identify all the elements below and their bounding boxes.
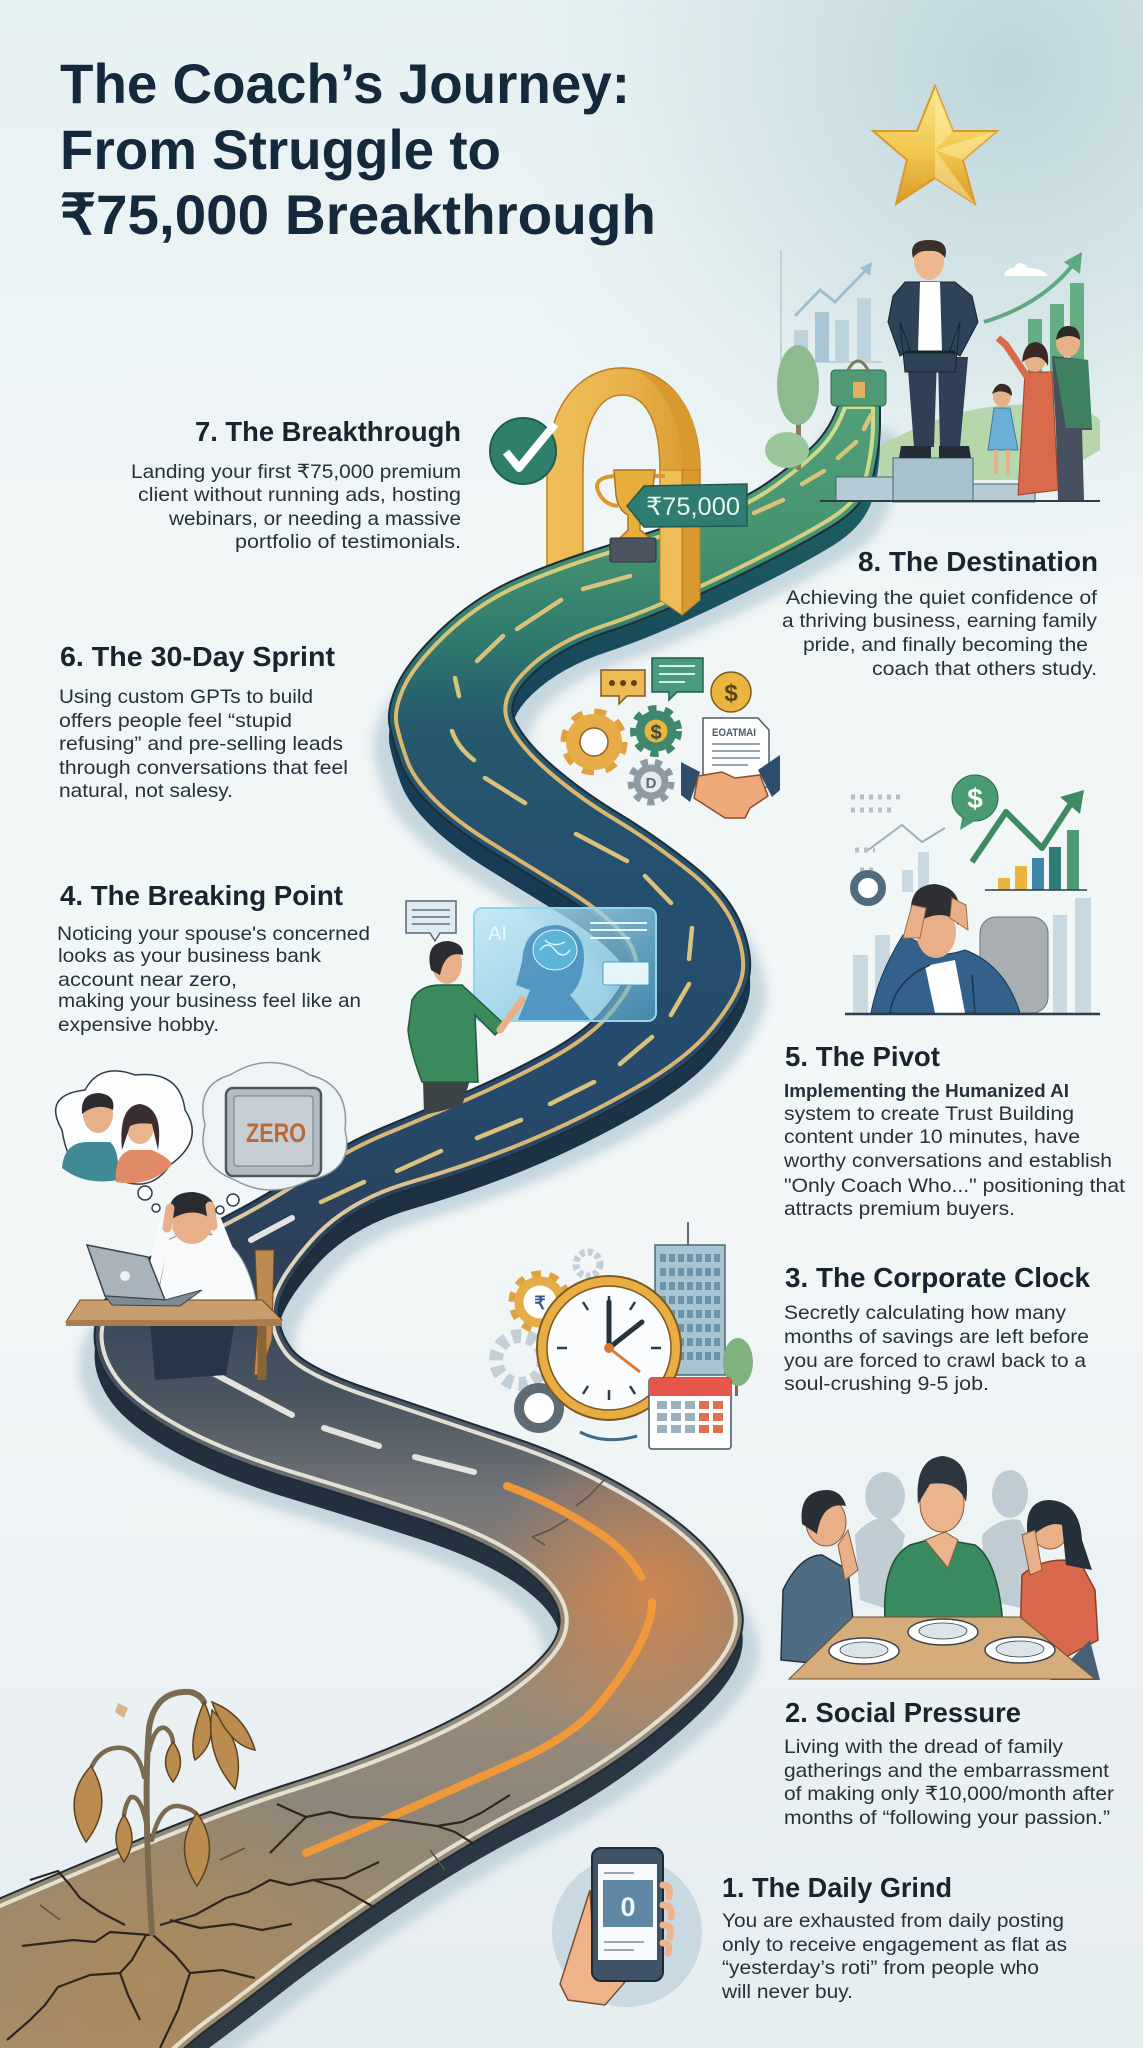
gold gear: ₹ bbox=[534, 1293, 546, 1313]
thought bubble: zero safe bbox=[203, 1062, 347, 1190]
step 4: The Breaking Point: 4. The Breaking Point bbox=[60, 880, 343, 911]
step 3: The Corporate Clock: you are forced to crawl back to a bbox=[784, 1350, 1086, 1372]
illustration: withered plant bbox=[74, 1692, 255, 1933]
data dots bbox=[851, 797, 901, 870]
stressed man at desk bbox=[66, 1192, 282, 1380]
step 5: The Pivot: Implementing the Humanized AI bbox=[784, 1081, 1069, 1101]
head bbox=[172, 1204, 212, 1244]
gold gear bbox=[566, 714, 622, 770]
phone bbox=[592, 1848, 663, 1981]
road bbox=[0, 400, 880, 2048]
step 4: The Breaking Point: Noticing your spouse's concerned bbox=[57, 923, 370, 945]
chair bbox=[254, 1250, 274, 1375]
brain head bbox=[516, 925, 590, 1020]
step 5: The Pivot bbox=[783, 1041, 1126, 1220]
step 6: The 30-Day Sprint: through conversations that feel bbox=[59, 757, 348, 779]
icon: speech bubble bbox=[406, 901, 456, 941]
step 1: The Daily Grind: 1. The Daily Grind bbox=[722, 1872, 952, 1903]
wilted leaves bbox=[74, 1702, 255, 1886]
title: The Coach’s Journey: bbox=[60, 52, 630, 115]
dollar coin bbox=[711, 672, 751, 712]
man on podium bbox=[888, 240, 978, 458]
step 5: The Pivot: attracts premium buyers. bbox=[784, 1198, 1015, 1220]
circle backdrop bbox=[552, 1857, 702, 2007]
step 7: The Breakthrough: 7. The Breakthrough bbox=[195, 416, 461, 447]
illustration: pivot stress with chart bbox=[845, 775, 1100, 1014]
step 2: Social Pressure: gatherings and the embarrassment bbox=[784, 1760, 1110, 1782]
green gear bbox=[634, 709, 678, 753]
tree bbox=[765, 345, 819, 470]
step 5: The Pivot: system to create Trust Building bbox=[784, 1103, 1074, 1125]
circular arrow bbox=[580, 1432, 637, 1440]
calendar bbox=[649, 1378, 731, 1449]
gold gear bbox=[513, 1275, 567, 1329]
step 6: The 30-Day Sprint bbox=[59, 641, 348, 802]
chat bubble gold bbox=[601, 670, 645, 704]
fingers bbox=[663, 1885, 671, 1953]
thought dots bbox=[138, 1186, 239, 1214]
step 7: The Breakthrough: Landing your first ₹75,000 premium bbox=[131, 461, 461, 483]
centre man bbox=[885, 1456, 1003, 1625]
building bbox=[655, 1222, 725, 1375]
illustration: strategy and deal icons bbox=[566, 658, 780, 818]
grey gear: D bbox=[646, 775, 657, 792]
chat bubble green bbox=[652, 658, 703, 700]
briefcase bbox=[831, 361, 886, 406]
right person bbox=[1020, 1500, 1100, 1680]
left person bbox=[781, 1490, 858, 1665]
AI label: AI bbox=[488, 923, 507, 945]
cloud bbox=[1004, 263, 1048, 276]
step 8: The Destination: 8. The Destination bbox=[858, 546, 1098, 577]
step 4: The Breaking Point: looks as your business bank bbox=[58, 945, 321, 967]
contract document bbox=[703, 718, 769, 787]
icon: green check badge bbox=[490, 418, 556, 484]
person pointing at panel bbox=[408, 941, 522, 1115]
step 6: The 30-Day Sprint: 6. The 30-Day Sprint bbox=[60, 641, 335, 672]
icon: price tag: ₹75,000 bbox=[646, 493, 740, 521]
icon: golden arch front pillar bbox=[660, 470, 700, 615]
step 7: The Breakthrough: webinars, or needing a massive bbox=[168, 508, 461, 530]
step 2: Social Pressure: of making only ₹10,000/month after bbox=[784, 1783, 1115, 1805]
step 2: Social Pressure bbox=[784, 1697, 1115, 1829]
step 3: The Corporate Clock: Secretly calculating how many bbox=[784, 1302, 1066, 1324]
step 1: The Daily Grind: will never buy. bbox=[721, 1981, 853, 2003]
podium bbox=[820, 458, 1100, 502]
pale gear bbox=[496, 1336, 544, 1384]
rising bars bbox=[985, 830, 1087, 890]
laptop bbox=[87, 1245, 202, 1306]
step 3: The Corporate Clock: 3. The Corporate Clock bbox=[785, 1262, 1090, 1293]
contract document: EOATMAI bbox=[712, 727, 756, 739]
step 6: The 30-Day Sprint: natural, not salesy. bbox=[59, 780, 233, 802]
panel bbox=[474, 908, 656, 1021]
small gears bbox=[576, 1252, 600, 1276]
tree bbox=[723, 1338, 753, 1396]
step 2: Social Pressure: Living with the dread of family bbox=[784, 1736, 1063, 1758]
dark gear bbox=[519, 1388, 559, 1428]
step 1: The Daily Grind: “yesterday’s roti” from people who bbox=[722, 1957, 1039, 1979]
road centre dashes: green and blue section bbox=[321, 415, 871, 1202]
shirt bbox=[157, 1232, 259, 1322]
hill bbox=[880, 405, 1100, 480]
handshake bbox=[681, 755, 780, 818]
safe bbox=[226, 1088, 321, 1176]
step 8: The Destination: pride, and finally becoming the bbox=[803, 634, 1088, 656]
illustration: phone in hand bbox=[552, 1848, 702, 2007]
grey gear bbox=[631, 762, 671, 802]
pale bars bbox=[853, 852, 1091, 1013]
step 2: Social Pressure: 2. Social Pressure bbox=[785, 1697, 1021, 1728]
thought bubble: couple bbox=[56, 1071, 192, 1184]
icon: gold star bbox=[873, 86, 997, 204]
step 3: The Corporate Clock bbox=[784, 1262, 1090, 1395]
plates bbox=[829, 1619, 1055, 1664]
illustration: AI hologram panel bbox=[474, 908, 656, 1021]
step 6: The 30-Day Sprint: refusing” and pre-selling leads bbox=[59, 733, 343, 755]
phone: 0 bbox=[620, 1892, 636, 1922]
ghost gossipers bbox=[855, 1470, 1040, 1610]
step 5: The Pivot: "Only Coach Who..." positioning that bbox=[784, 1175, 1126, 1197]
step 3: The Corporate Clock: soul-crushing 9-5 job. bbox=[784, 1373, 989, 1395]
title: ₹75,000 Breakthrough bbox=[60, 183, 656, 246]
step 6: The 30-Day Sprint: offers people feel “stupid bbox=[59, 710, 292, 732]
green bars bbox=[1028, 283, 1084, 404]
icon: golden arch bbox=[547, 368, 700, 600]
gear bbox=[854, 874, 882, 902]
road centre dashes: grey section bbox=[211, 1218, 474, 1472]
family bbox=[988, 326, 1092, 500]
step 4: The Breaking Point bbox=[57, 880, 370, 1036]
step 4: The Breaking Point: expensive hobby. bbox=[58, 1014, 219, 1036]
table bbox=[789, 1617, 1095, 1679]
green dollar bubble: $ bbox=[967, 783, 983, 814]
legs bbox=[150, 1322, 235, 1380]
green dollar bubble bbox=[952, 775, 998, 830]
green gear: $ bbox=[650, 722, 662, 744]
step 7: The Breakthrough bbox=[131, 416, 461, 553]
chart left bbox=[781, 250, 882, 362]
drifting fragment bbox=[115, 1703, 128, 1718]
stems bbox=[92, 1692, 204, 1933]
step 8: The Destination: coach that others study. bbox=[872, 658, 1097, 680]
green growth arrow bbox=[984, 252, 1082, 322]
step 6: The 30-Day Sprint: Using custom GPTs to build bbox=[59, 686, 313, 708]
step 1: The Daily Grind bbox=[721, 1872, 1067, 2003]
hand arm bbox=[560, 1890, 625, 2005]
green arrow bbox=[972, 790, 1084, 862]
step 2: Social Pressure: months of “following your passion.” bbox=[784, 1807, 1110, 1829]
step 4: The Breaking Point: making your business feel like an bbox=[58, 990, 361, 1012]
road shadow bbox=[0, 430, 896, 2048]
table bbox=[66, 1300, 282, 1380]
chair bbox=[980, 917, 1048, 1013]
pale line chart bbox=[868, 825, 945, 850]
step 8: The Destination bbox=[782, 546, 1098, 680]
illustration: corporate clock bbox=[496, 1222, 753, 1449]
icon: price tag bbox=[627, 484, 747, 527]
step 1: The Daily Grind: only to receive engagement as flat as bbox=[722, 1934, 1067, 1956]
icon: trophy bbox=[597, 470, 665, 562]
road centre line: orange section bbox=[306, 1486, 652, 1853]
step 5: The Pivot: content under 10 minutes, have bbox=[784, 1126, 1080, 1148]
title: From Struggle to bbox=[60, 118, 501, 181]
clock bbox=[537, 1276, 681, 1420]
illustration: social pressure dinner bbox=[781, 1456, 1100, 1680]
floor line bbox=[845, 1013, 1100, 1015]
illustration: destination scene bbox=[765, 240, 1100, 502]
road cracks bbox=[7, 1479, 605, 2048]
step 8: The Destination: Achieving the quiet confidence of bbox=[786, 587, 1098, 609]
step 1: The Daily Grind: You are exhausted from daily posting bbox=[722, 1910, 1064, 1932]
stressed man bbox=[871, 884, 1020, 1013]
step 8: The Destination: a thriving business, earning family bbox=[782, 610, 1097, 632]
step 5: The Pivot: worthy conversations and establish bbox=[783, 1150, 1112, 1172]
step 7: The Breakthrough: client without running ads, hosting bbox=[138, 484, 461, 506]
title bbox=[60, 52, 656, 246]
step 4: The Breaking Point: account near zero, bbox=[58, 969, 237, 991]
step 5: The Pivot: 5. The Pivot bbox=[785, 1041, 940, 1072]
safe label: ZERO bbox=[246, 1118, 306, 1148]
step 3: The Corporate Clock: months of savings are left before bbox=[784, 1326, 1089, 1348]
panel details bbox=[590, 923, 647, 938]
dollar coin: $ bbox=[724, 680, 738, 707]
step 7: The Breakthrough: portfolio of testimonials. bbox=[235, 531, 461, 553]
